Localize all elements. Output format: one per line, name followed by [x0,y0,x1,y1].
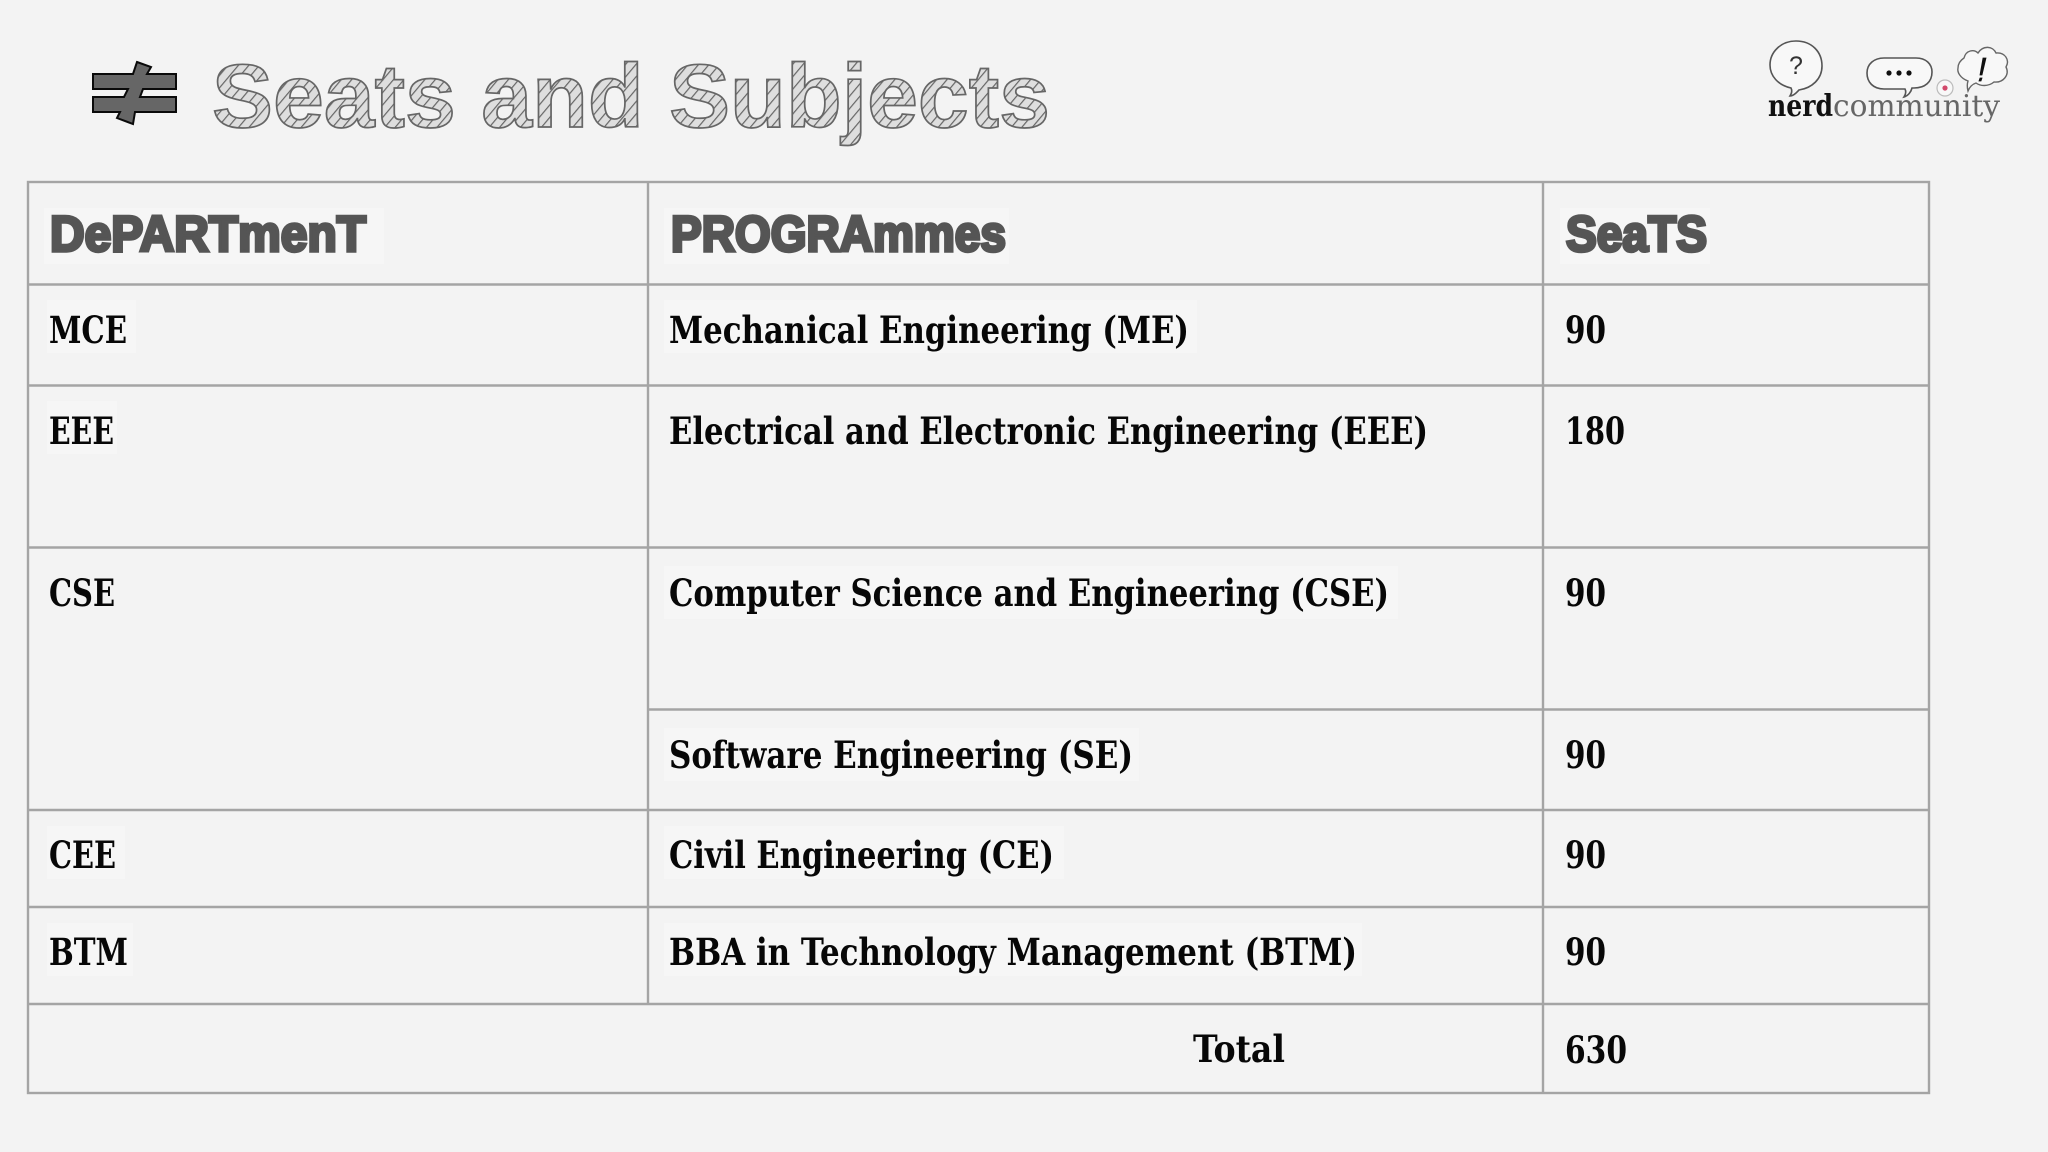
row: BTM: 90 [1565,930,1606,974]
row: EEE: 180 [1565,409,1625,453]
text highlights behind cell text [44,208,1710,976]
logo: nerdcommunity [1768,41,2007,124]
icon: question speech bubble [1770,41,1822,96]
icon: ellipsis speech bubble [1867,58,1932,97]
row: CSE software engineering: Software Engineering (SE) [669,733,1133,777]
row: MCE: 90 [1565,308,1606,352]
row: CSE computer science [49,571,1606,615]
row: EEE [49,409,1625,453]
row: BTM: BTM [49,930,128,974]
column header: department: DePARTmenT [50,206,366,262]
row: EEE: EEE [49,409,114,453]
icon: heart bubble [1937,80,1953,96]
column header: programmes: PROGRAmmes [671,206,1006,262]
row: EEE: Electrical and Electronic Engineering (EEE) [669,409,1428,453]
title: Seats and Subjects [212,47,1050,147]
table: seats and programmes [28,182,1929,1093]
row: total [1193,1027,1627,1072]
logo wordmark: community [1833,89,2000,124]
icon: exclamation thought cloud [1958,47,2007,91]
row: BTM: BBA in Technology Management (BTM) [669,930,1357,974]
icon: question speech bubble: ? [1789,52,1803,80]
row: BTM [49,930,1606,974]
row: CSE computer science: CSE [49,571,115,615]
row: total: Total [1193,1027,1285,1071]
row: MCE [49,308,1606,352]
row: CSE computer science: 90 [1565,571,1606,615]
row: CEE: CEE [49,833,116,877]
row: total: 630 [1565,1028,1627,1072]
row: CEE: Civil Engineering (CE) [669,833,1054,877]
logo wordmark: nerd [1768,89,1833,124]
row: MCE: Mechanical Engineering (ME) [669,308,1189,352]
row: CSE computer science: Computer Science and Engineering (CSE) [669,571,1389,615]
row: CSE software engineering [669,733,1606,777]
row: MCE: MCE [49,308,127,352]
row: CSE software engineering: 90 [1565,733,1606,777]
icon: not-equal sign [93,62,176,124]
row: CEE [49,833,1606,877]
column header: seats: SeaTS [1566,206,1707,262]
table grid lines [28,182,1929,1093]
row: CEE: 90 [1565,833,1606,877]
